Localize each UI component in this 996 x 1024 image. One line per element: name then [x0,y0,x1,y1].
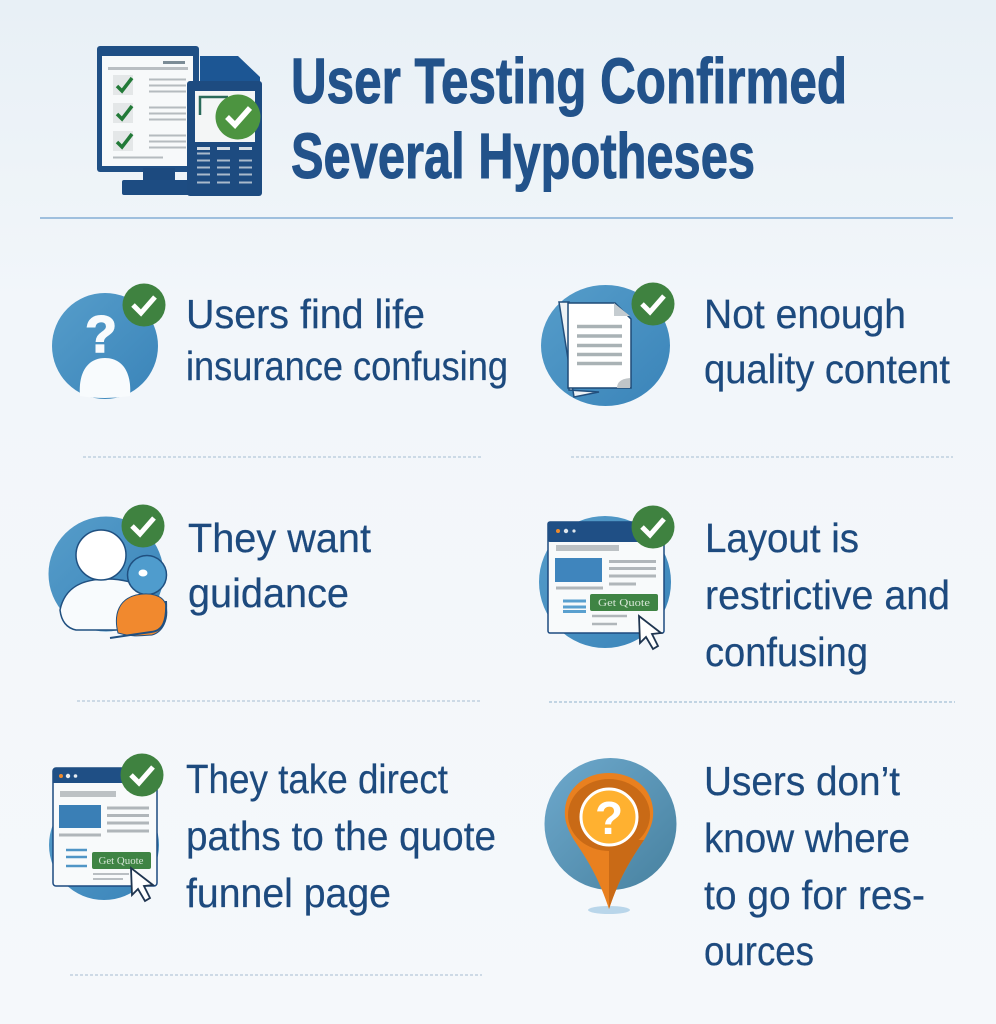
icon: map pin with question mark [544,758,676,914]
icon: person with orange advisor [48,504,167,638]
text [188,515,372,616]
icon: person with question mark: ? [85,306,117,364]
item 6: users don't know where to go for resources [544,758,925,974]
title: Several Hypotheses [291,120,755,192]
item 5: they take direct paths to the quote funnel page [49,754,496,916]
text: Layout is [705,515,859,561]
text: Users find life [186,291,425,337]
icon: web page with get quote button: Get Quote [598,598,650,609]
text: confusing [705,629,868,675]
icon: web page with cursor [49,754,164,901]
title [291,45,847,192]
text [704,291,951,392]
text [705,515,950,675]
text: funnel page [186,870,391,916]
title: User Testing Confirmed [291,45,847,117]
text: ources [704,928,814,974]
item 1: users find life insurance confusing [52,284,508,399]
text: quality content [704,346,951,392]
item 3: they want guidance [48,504,372,638]
text: They take direct [186,756,449,802]
header icon: monitor checklist and calculator [97,46,262,196]
text: know where [704,815,910,861]
text: to go for res- [704,872,925,918]
text: restrictive and [705,572,950,618]
text [186,756,496,916]
item 4: layout is restrictive and confusing [539,506,950,675]
text: Users don’t [704,758,901,804]
text: They want [188,515,372,561]
icon: map pin with question mark: ? [595,792,623,844]
item 2: not enough quality content [541,282,951,406]
text: Not enough [704,291,906,337]
icon: web page with cursor: Get Quote [98,856,144,867]
text: paths to the quote [186,813,496,859]
icon: documents [541,282,674,406]
text [186,291,508,389]
icon: web page with get quote button [539,506,674,649]
text [704,758,925,974]
text: insurance confusing [186,343,508,389]
icon: person with question mark [52,284,166,399]
text: guidance [188,570,349,616]
